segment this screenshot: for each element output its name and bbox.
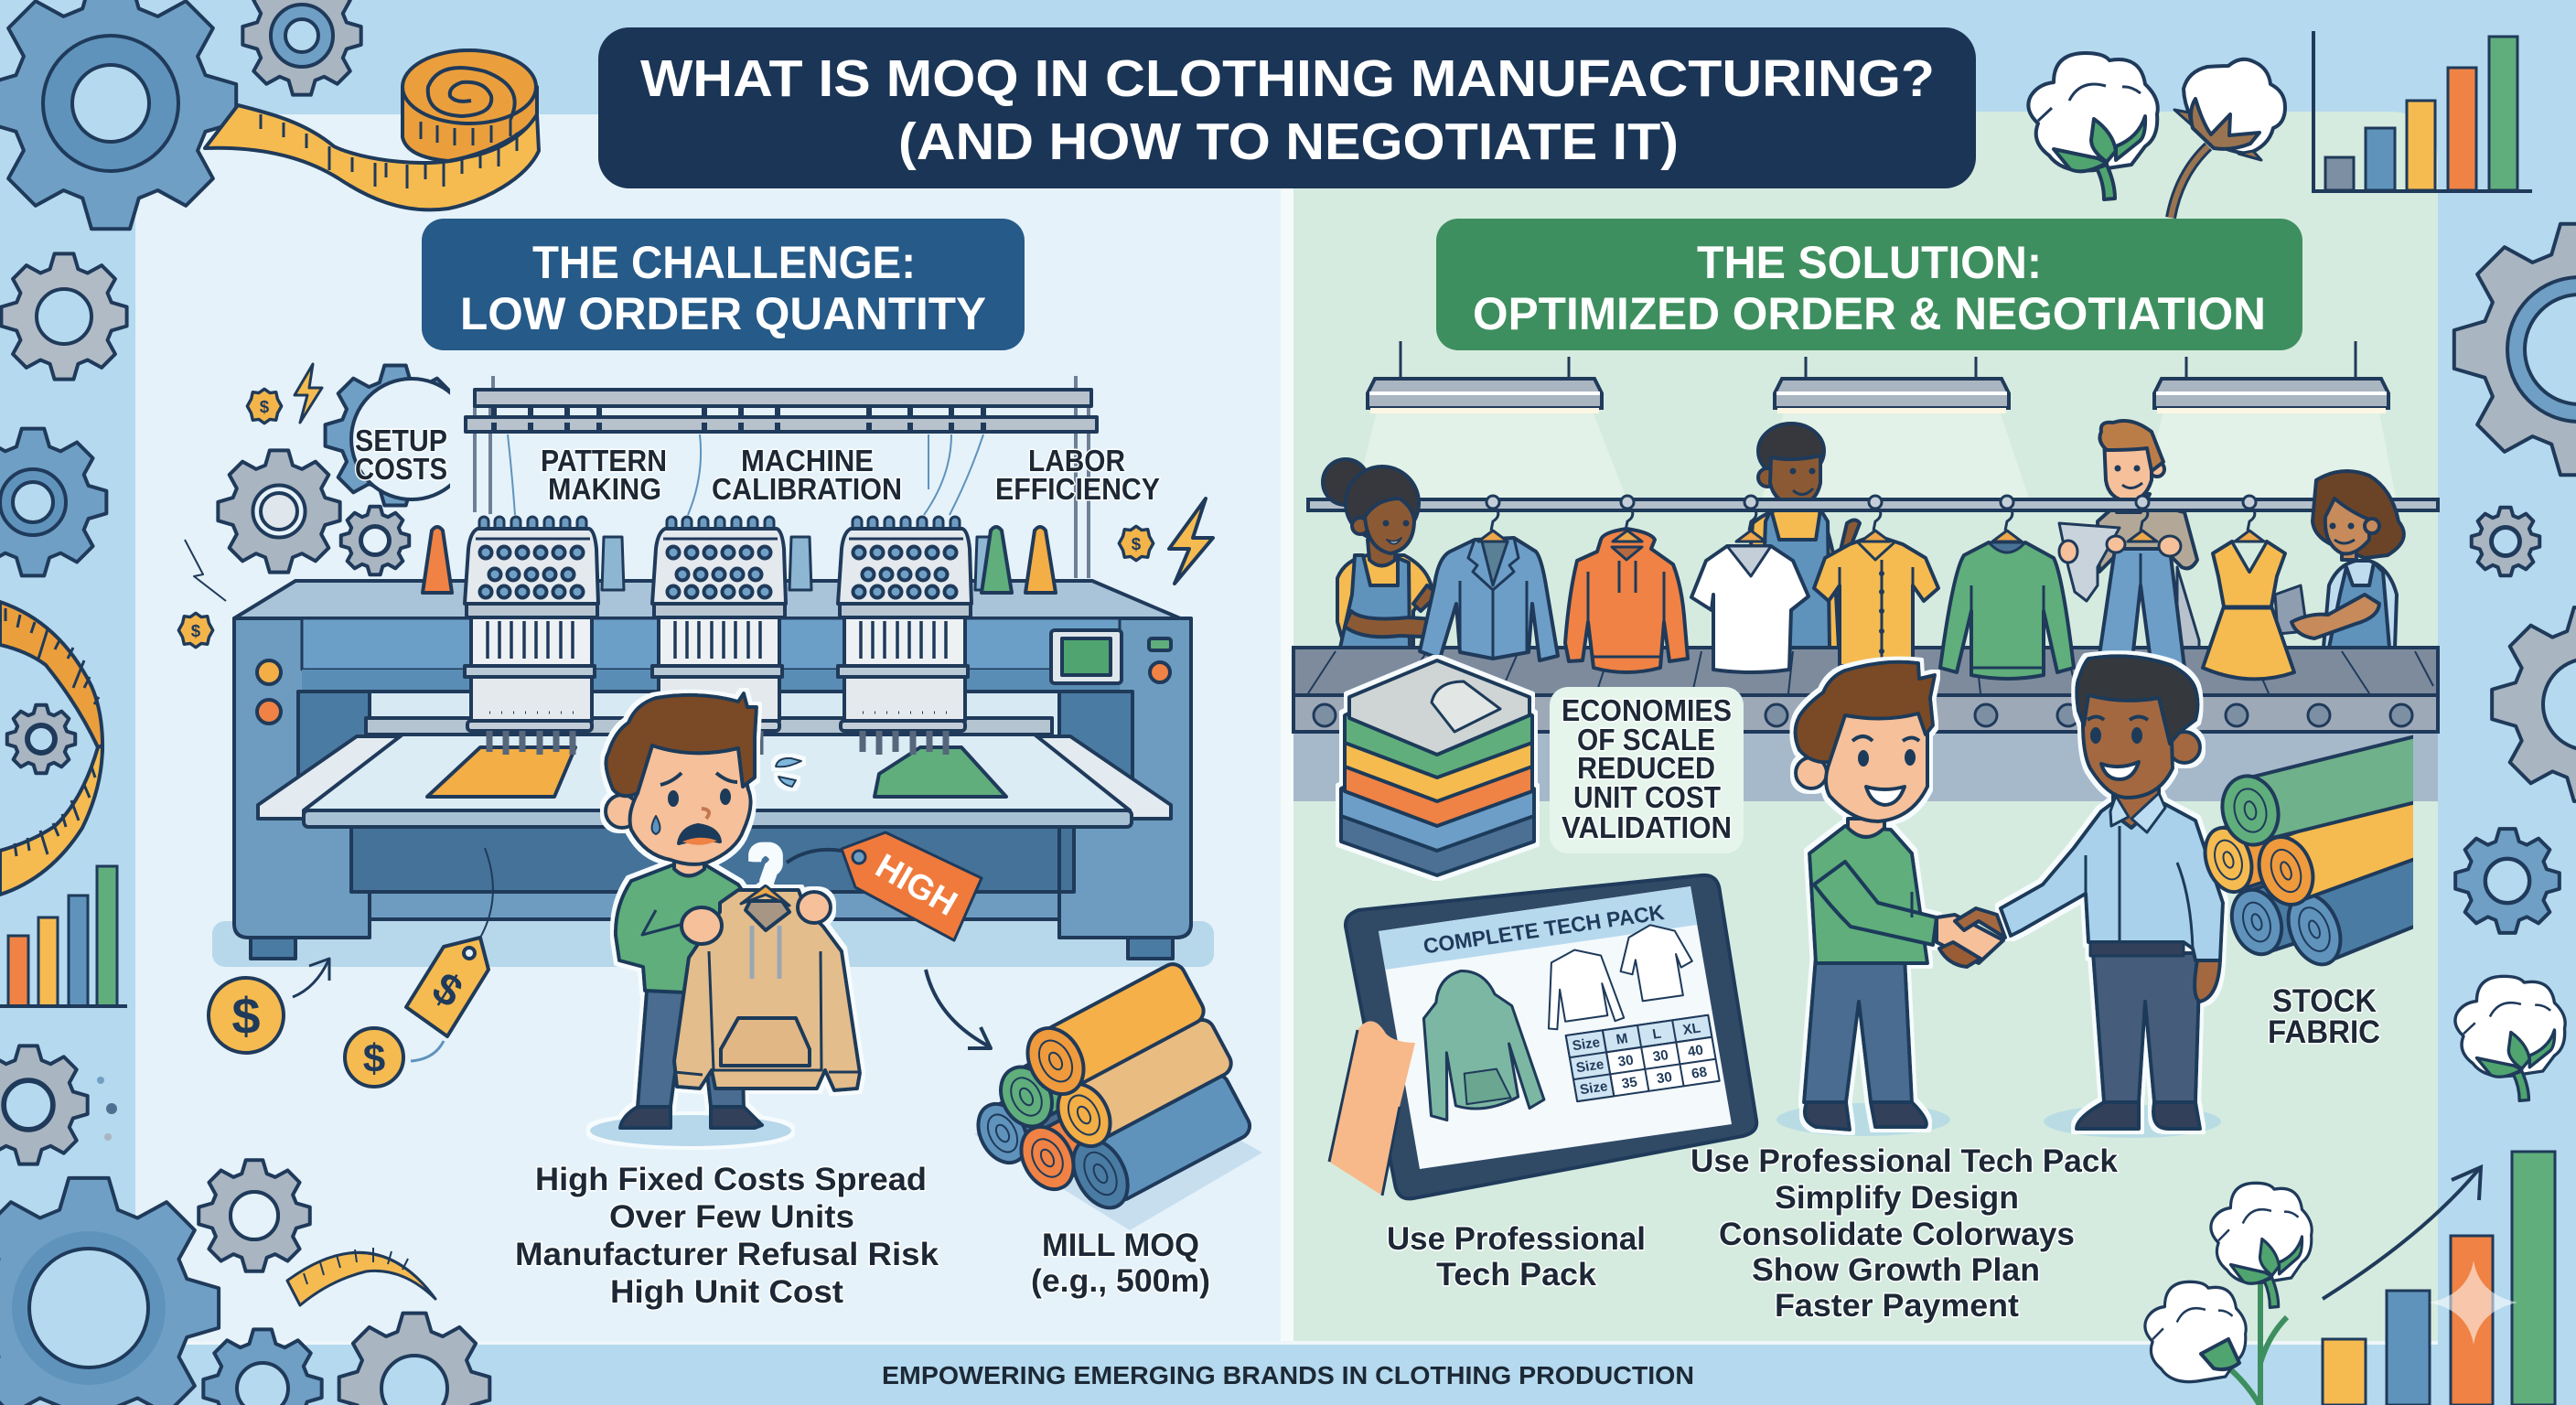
workers in front of the rod (1323, 459, 2404, 648)
panel heading: the solution: THE SOLUTION: (1697, 237, 2042, 288)
text: challenge points: High Fixed Costs Spread (535, 1162, 927, 1197)
panel heading: the challenge: THE CHALLENGE: (532, 237, 916, 288)
tablet with tech pack: 30 (1652, 1047, 1669, 1065)
text: mill moq (1031, 1228, 1210, 1299)
coins, price tag and arrows (209, 848, 991, 1087)
bar chart: top right (2313, 31, 2532, 191)
cotton plant: right edge (2455, 976, 2565, 1100)
machine labels: MACHINE (741, 444, 874, 477)
decorative gears: left edge (0, 0, 489, 1405)
callout: economies of scale: OF SCALE (1577, 723, 1715, 756)
setup cost gears and sparks (178, 364, 1213, 648)
footer tagline: EMPOWERING EMERGING BRANDS IN CLOTHING PRODUCTION (882, 1361, 1694, 1389)
title banner: (AND HOW TO NEGOTIATE IT) (898, 113, 1679, 171)
text: challenge points (515, 1162, 939, 1310)
tablet with tech pack: Size (1579, 1078, 1609, 1098)
callout: economies of scale: ECONOMIES (1562, 693, 1732, 727)
coins, price tag and arrows: $ (424, 963, 470, 1017)
machine labels: CALIBRATION (712, 472, 902, 506)
text: use professional tech pack (1387, 1221, 1646, 1292)
text: use professional tech pack: Use Professional (1387, 1221, 1646, 1257)
measuring tape: left edge ring (0, 602, 102, 895)
garment rod (1308, 499, 2438, 510)
measuring tape: bottom left (287, 1248, 435, 1305)
panel heading: the challenge: LOW ORDER QUANTITY (460, 288, 986, 339)
embroidery machine (212, 376, 1214, 967)
tablet with tech pack: 30 (1656, 1069, 1673, 1087)
title banner: WHAT IS MOQ IN CLOTHING MANUFACTURING? (640, 49, 1935, 108)
text: negotiation tactics: Show Growth Plan (1752, 1252, 2040, 1288)
callout: economies of scale: UNIT COST (1573, 780, 1721, 814)
conveyor belt (1293, 648, 2438, 801)
panel heading: the solution (1436, 219, 2302, 350)
workers behind the rod (1743, 421, 2199, 648)
factory lamps (1354, 341, 2397, 503)
bar chart: left edge (0, 866, 127, 1006)
tablet with tech pack: 30 (1616, 1053, 1635, 1070)
hanging garments (1420, 496, 2294, 679)
machine labels: EFFICIENCY (995, 472, 1160, 506)
text: challenge points: High Unit Cost (610, 1274, 843, 1310)
machine labels: COSTS (355, 452, 447, 486)
machine labels: MAKING (548, 472, 661, 506)
text: challenge points: Manufacturer Refusal Risk (515, 1237, 939, 1272)
panel heading: the solution: OPTIMIZED ORDER & NEGOTIATION (1473, 288, 2266, 339)
title banner (598, 27, 1976, 188)
growth chart with arrow: bottom right (2323, 1152, 2555, 1405)
fabric rolls: mill (969, 958, 1262, 1230)
tablet with tech pack: 68 (1690, 1065, 1708, 1082)
text: negotiation tactics: Faster Payment (1775, 1288, 2019, 1324)
text: stock fabric: STOCK (2272, 983, 2377, 1019)
text: mill moq: MILL MOQ (1042, 1228, 1199, 1263)
fabric rolls: stock (2203, 735, 2413, 966)
folded garment stack (1341, 660, 1534, 875)
text: mill moq: (e.g., 500m) (1031, 1263, 1210, 1299)
text: negotiation tactics (1690, 1143, 2119, 1324)
cotton plants: top right (2028, 53, 2285, 218)
measuring tape: top left (205, 50, 539, 209)
price tag: high: HIGH (869, 847, 963, 924)
coins, price tag and arrows: $ (363, 1036, 385, 1081)
tablet with tech pack: Size (1575, 1056, 1605, 1076)
cotton plant: bottom right (2145, 1183, 2312, 1405)
machine labels: LABOR (1028, 444, 1125, 477)
panel heading: the challenge (422, 219, 1025, 350)
machine labels: SETUP (355, 424, 447, 457)
text: use professional tech pack: Tech Pack (1436, 1257, 1597, 1292)
tablet with tech pack: Size (1571, 1035, 1601, 1054)
tablet with tech pack: L (1651, 1026, 1662, 1043)
text: negotiation tactics: Use Professional Tech Pack (1690, 1143, 2119, 1179)
tablet with tech pack: COMPLETE TECH PACK (1422, 900, 1666, 958)
machine labels (355, 424, 1160, 506)
text: stock fabric: FABRIC (2268, 1014, 2380, 1050)
coins, price tag and arrows: $ (231, 987, 261, 1045)
callout: economies of scale: REDUCED (1577, 751, 1715, 785)
tablet with tech pack: 35 (1621, 1074, 1639, 1092)
machine labels: PATTERN (541, 444, 667, 477)
tablet with tech pack: 40 (1687, 1043, 1704, 1060)
text: challenge points: Over Few Units (609, 1199, 854, 1235)
callout: economies of scale: VALIDATION (1562, 810, 1732, 844)
tablet with tech pack: M (1615, 1031, 1629, 1047)
tablet with tech pack: XL (1681, 1020, 1701, 1038)
text: stock fabric (2268, 983, 2380, 1050)
tablet with tech pack (1329, 875, 1756, 1198)
text: negotiation tactics: Consolidate Colorways (1719, 1217, 2075, 1252)
text: negotiation tactics: Simplify Design (1775, 1180, 2019, 1216)
decorative gears: right edge (2454, 224, 2576, 933)
worried customer holding hoodie (590, 693, 860, 1146)
callout: economies of scale (1550, 687, 1744, 853)
handshake: brand owner and manufacturer (1776, 656, 2223, 1138)
price tag: high (787, 832, 982, 940)
